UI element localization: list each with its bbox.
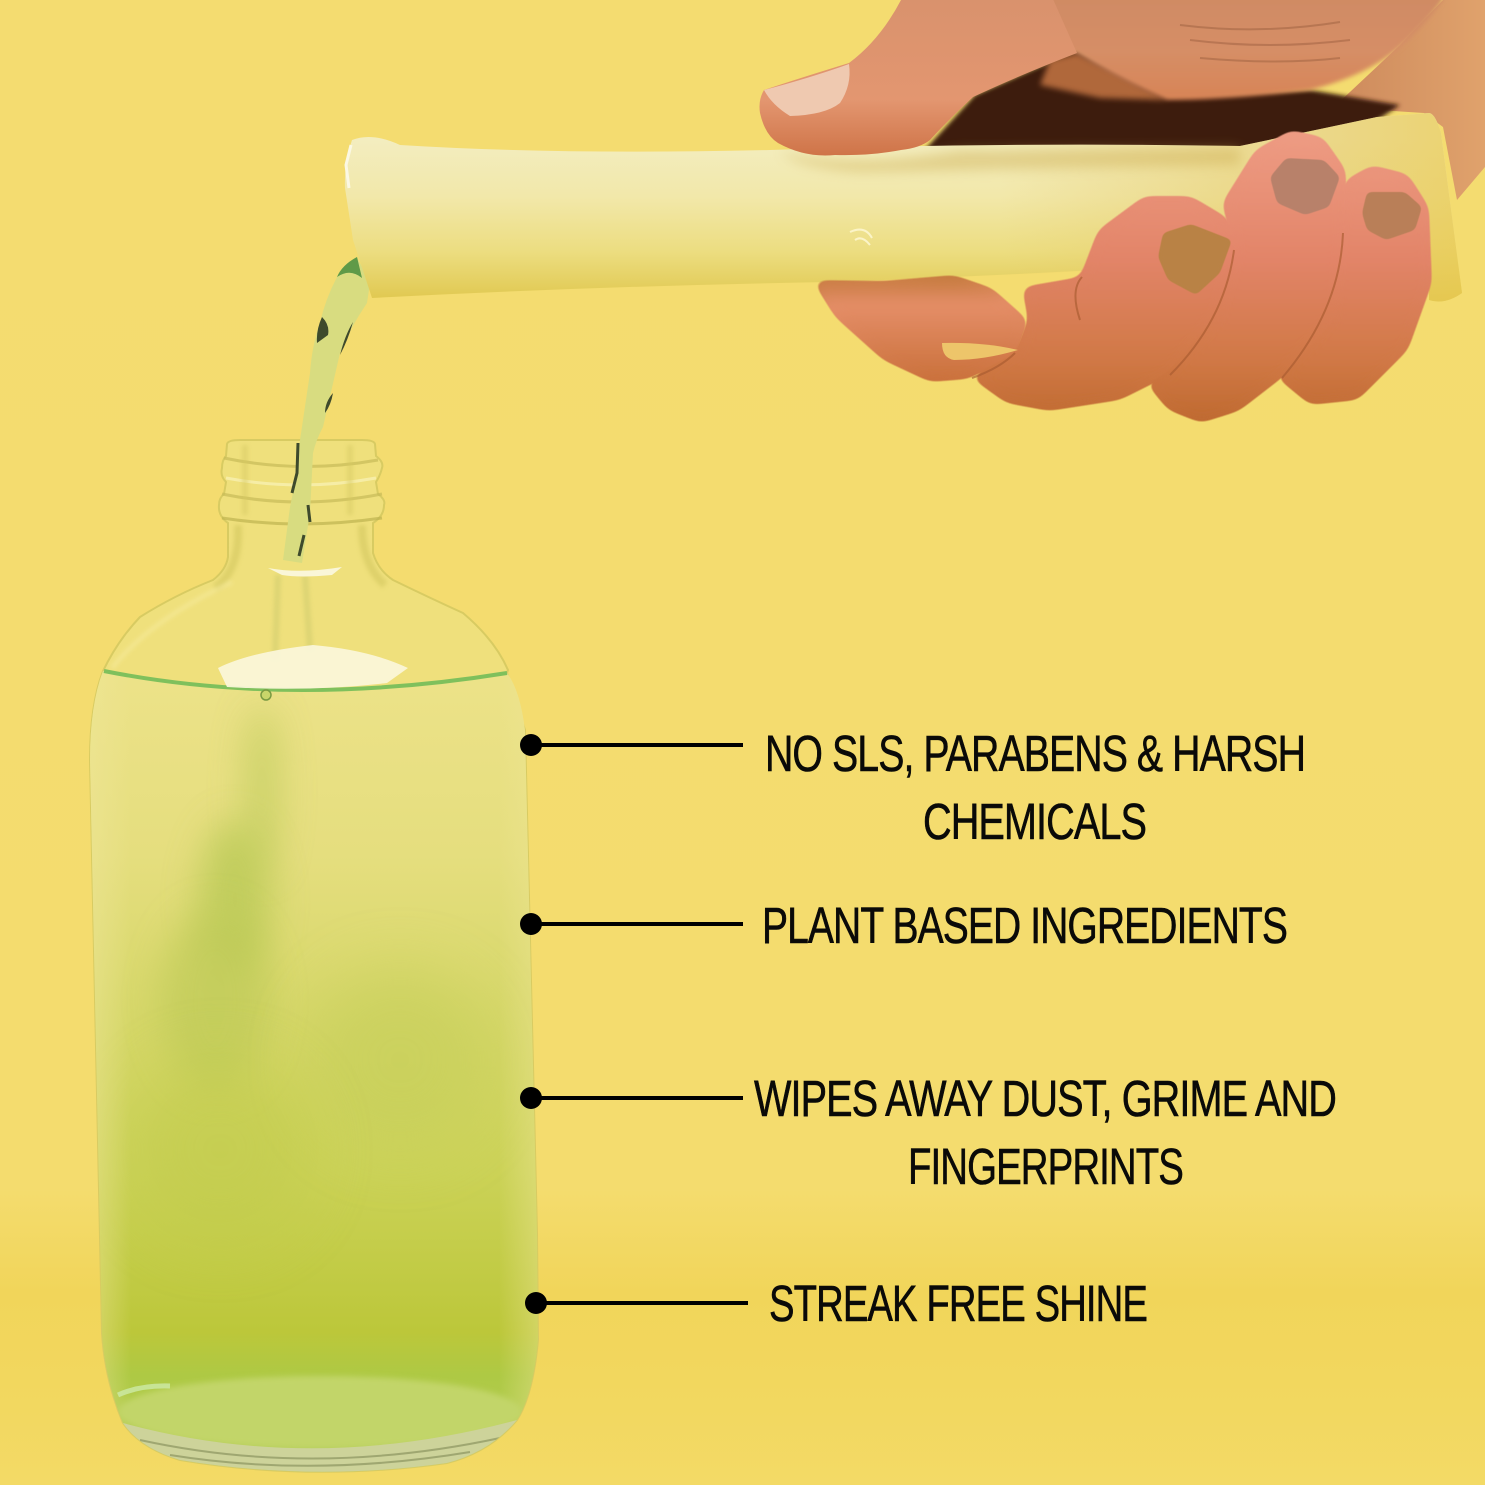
thumbnail: [764, 64, 850, 116]
surface bubble: [261, 690, 271, 700]
label: [754, 1070, 1336, 1195]
bottle: [85, 440, 545, 1482]
wrist and far palm: [1334, 0, 1485, 200]
label: WIPES AWAY DUST, GRIME AND: [754, 1070, 1336, 1127]
palm shadow: [920, 50, 1400, 155]
callout: plant based: [520, 897, 1287, 954]
finger one nail: [942, 343, 1018, 360]
liquid: [85, 665, 545, 1482]
finger two nail: [1158, 224, 1232, 295]
hand, upper part: [920, 0, 1485, 200]
tube darker end: [1000, 113, 1462, 301]
neck rings: [112, 445, 385, 668]
finger creases: [972, 233, 1343, 378]
thumb: [760, 0, 1077, 156]
palm creases: [1180, 22, 1350, 62]
neck reflection: [268, 567, 342, 576]
label: NO SLS, PARABENS & HARSH: [765, 725, 1305, 782]
stream refraction through shoulder: [275, 575, 310, 660]
liquid surface line: [104, 671, 507, 690]
inner palm fold: [1040, 53, 1167, 100]
label: FINGERPRINTS: [908, 1138, 1183, 1195]
tube mark: [850, 230, 872, 245]
palm mound: [960, 0, 1443, 100]
liquid stream: [283, 257, 370, 563]
glass base rim: [123, 1420, 517, 1472]
label: CHEMICALS: [923, 793, 1146, 850]
torn rim: [346, 145, 351, 188]
callout: streak free: [525, 1275, 1147, 1332]
green swirl: [156, 710, 447, 1146]
pointer: [525, 1292, 748, 1314]
finger four nail: [1362, 192, 1422, 240]
side highlights: [90, 692, 538, 1412]
tube body: [345, 113, 1462, 301]
thumb shadow on tube: [780, 148, 1240, 172]
finger four: [1276, 165, 1432, 405]
pointer: [520, 734, 743, 756]
thumb shape: [760, 0, 1077, 156]
pointer: [520, 913, 743, 935]
soap tube: [345, 113, 1462, 301]
label: STREAK FREE SHINE: [769, 1275, 1147, 1332]
finger one: [812, 275, 1028, 382]
shoulder reflection: [218, 645, 408, 689]
callout: no harsh chemicals: [520, 725, 1305, 850]
pointer: [520, 1087, 743, 1109]
left base swirl: [118, 1386, 170, 1395]
hand, lower fingers: [812, 130, 1432, 423]
finger three nail: [1270, 158, 1340, 215]
bottle glass: [90, 440, 538, 1472]
label: [765, 725, 1305, 850]
finger three: [1146, 130, 1346, 423]
finger two: [970, 196, 1237, 411]
label: PLANT BASED INGREDIENTS: [762, 897, 1287, 954]
base of liquid: [118, 1376, 522, 1448]
callout: wipes away: [520, 1070, 1336, 1195]
